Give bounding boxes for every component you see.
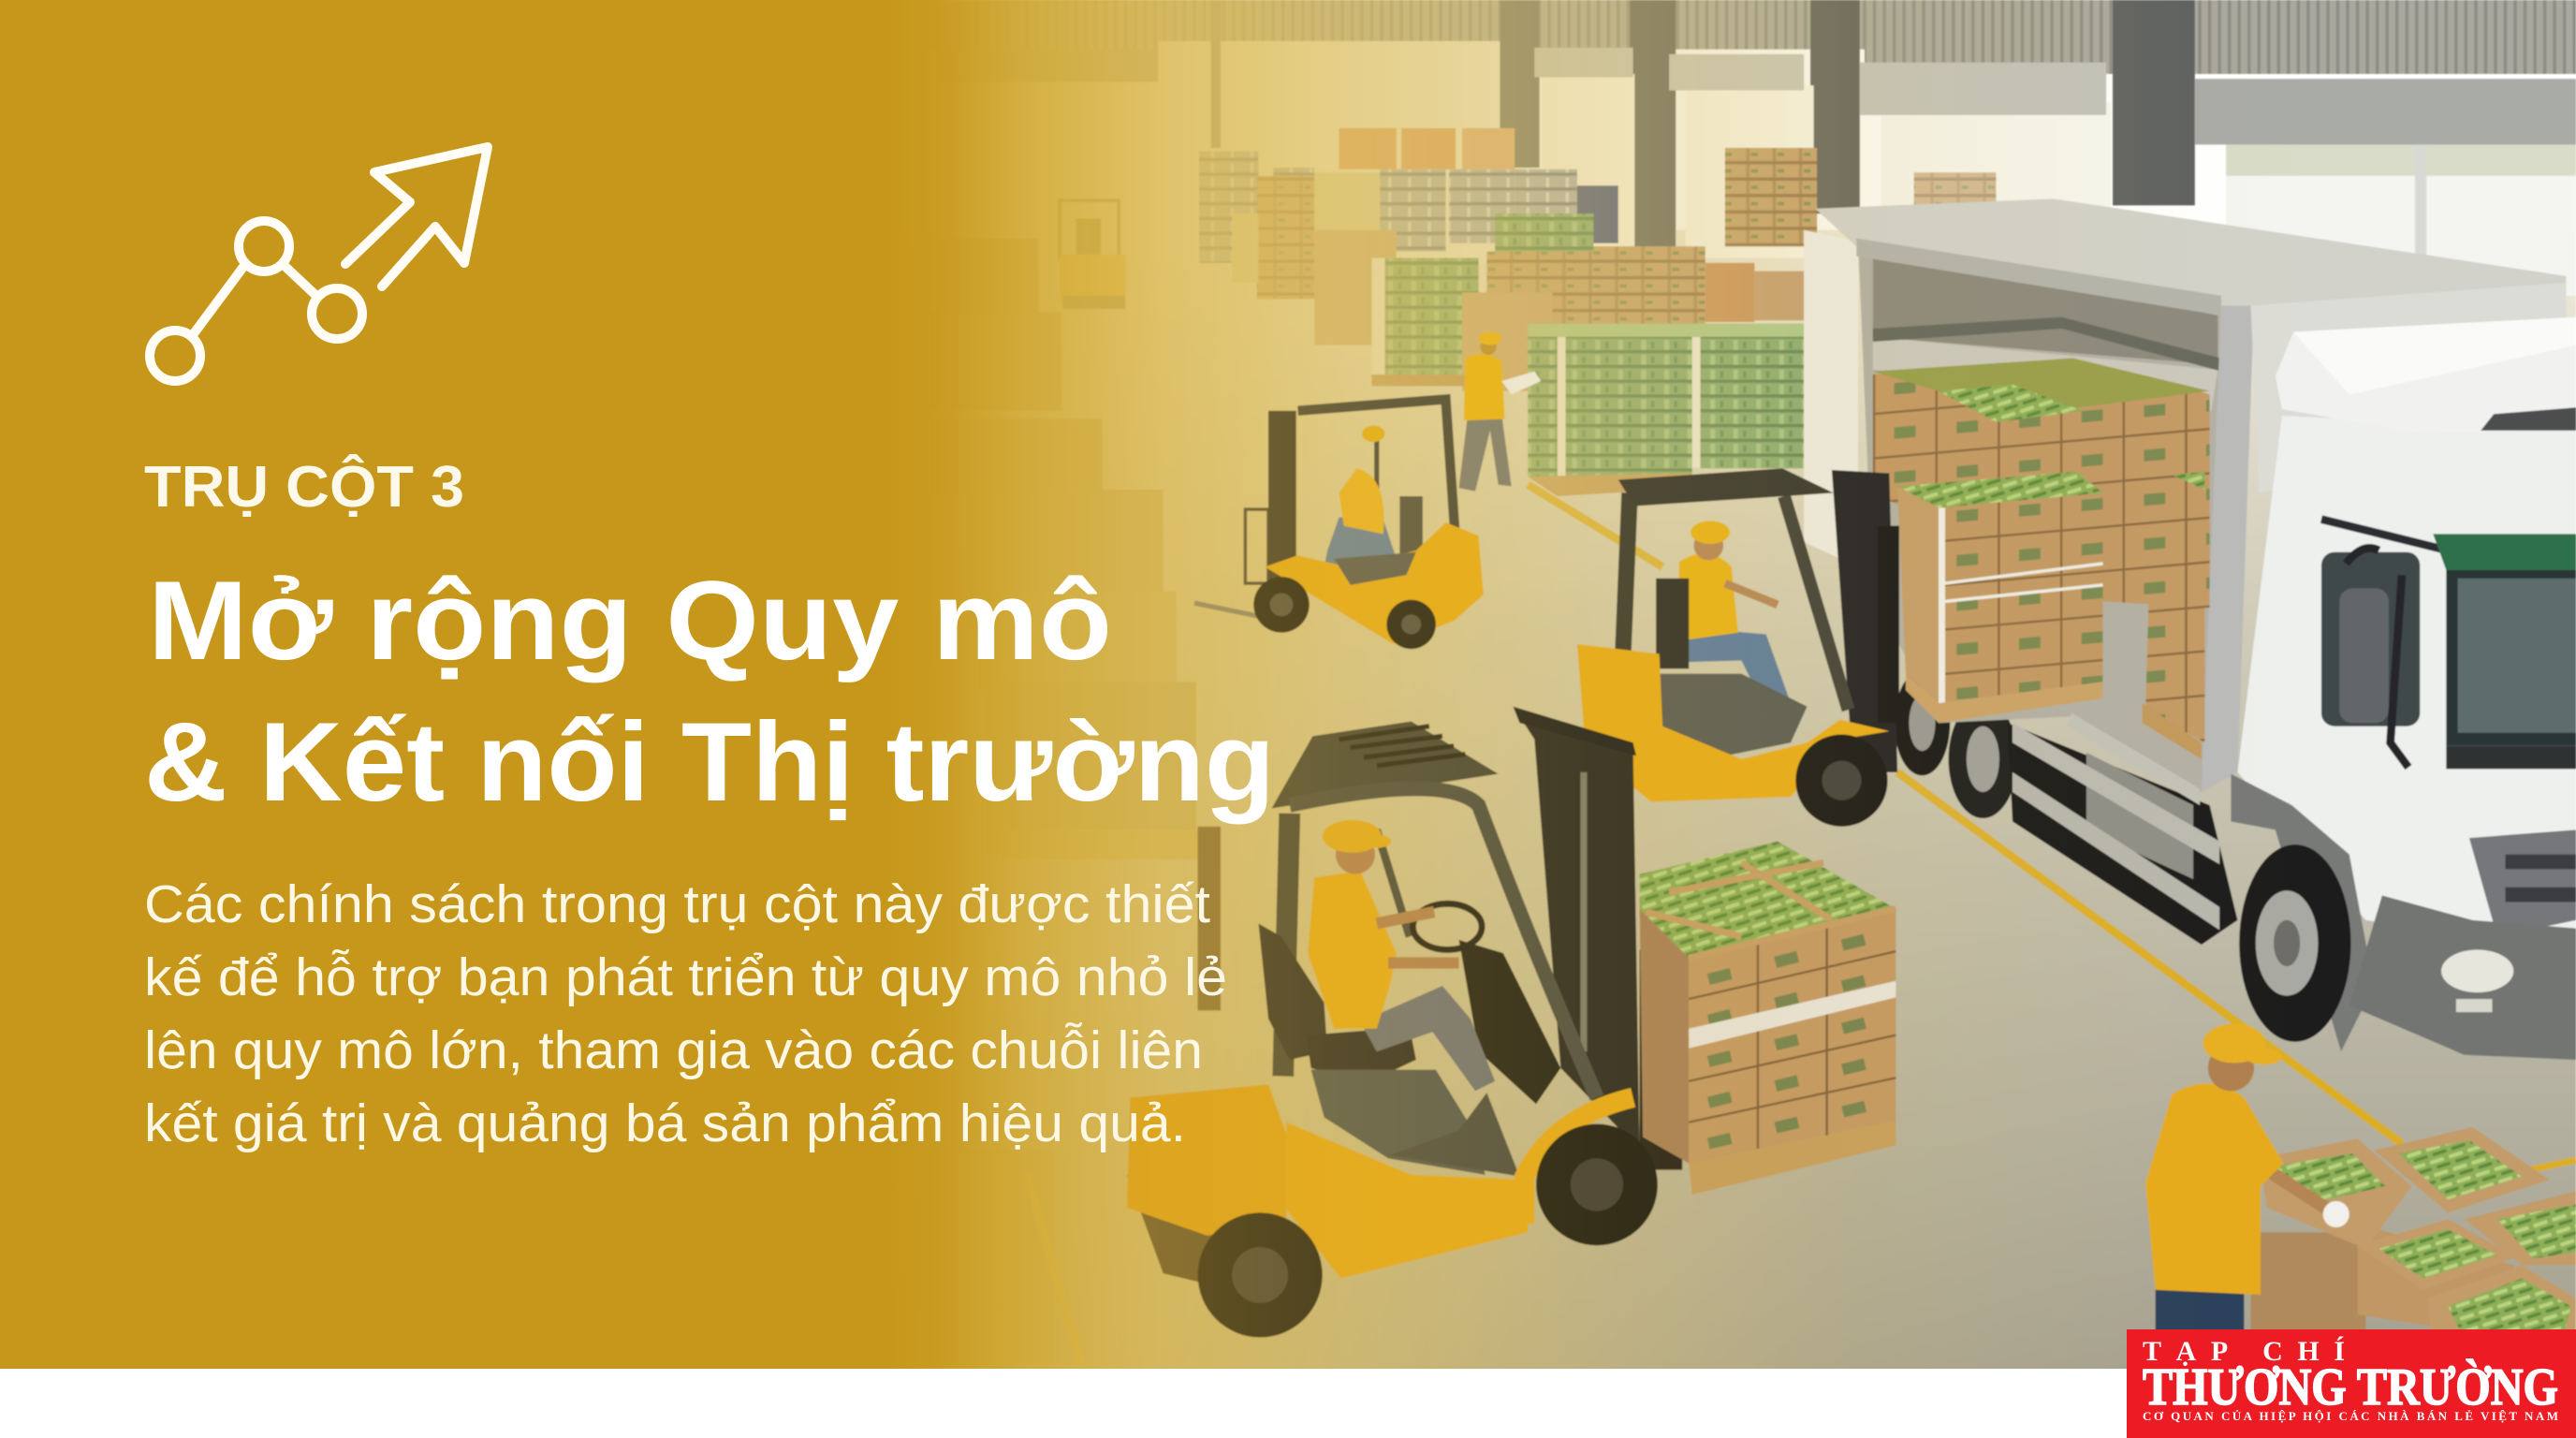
body paragraph: kế để hỗ trợ bạn phát triển từ quy mô nhỏ lẻ	[144, 947, 1227, 1007]
body paragraph: lên quy mô lớn, tham gia vào các chuỗi liên	[144, 1020, 1203, 1080]
far pallet stacks	[1199, 128, 1808, 391]
logo: Tạp chí Thương Trường: CƠ QUAN CỦA HIỆP HỘI CÁC NHÀ BÁN LẺ VIỆT NAM	[2143, 1409, 2558, 1423]
body paragraph: Các chính sách trong trụ cột này được thiết	[144, 874, 1210, 934]
main title	[144, 558, 1275, 825]
warehouse floor	[965, 229, 2576, 1369]
middle forklift	[1194, 399, 1484, 649]
right stack in truck	[2143, 472, 2204, 759]
front forklift seat	[1258, 923, 1416, 1084]
warehouse roof and back wall	[920, 0, 2576, 263]
main title: & Kết nối Thị trường	[144, 699, 1275, 825]
truck rear wheels	[1895, 680, 2012, 819]
pallet on centre forklift	[1897, 472, 2103, 723]
truck cab	[2231, 317, 2576, 1060]
body paragraph	[144, 874, 1227, 1153]
pale haze over the far warehouse	[919, 0, 1984, 1369]
centre forklift	[1577, 468, 1899, 827]
cucumber crates bottom right	[2250, 1127, 2576, 1339]
front forklift dashboard	[1459, 940, 1560, 1104]
logo: Tạp chí Thương Trường	[2127, 1329, 2576, 1438]
carton pallet on front forklift	[1640, 842, 1895, 1195]
truck front wheel	[2239, 844, 2351, 1042]
warehouse door openings	[1534, 48, 2576, 296]
background photo: warehouse scene	[916, 0, 2576, 1369]
main title: Mở rộng Quy mô	[148, 558, 1112, 683]
body paragraph: kết giá trị và quảng bá sản phẩm hiệu quả.	[144, 1093, 1186, 1153]
floor lane lines	[1027, 485, 2576, 1364]
icon: growth chart with arrow	[150, 147, 488, 381]
front forklift driver	[1308, 820, 1495, 1091]
logo: Tạp chí Thương Trường: TẠP CHÍ	[2143, 1336, 2345, 1367]
worker bottom right	[2145, 1023, 2349, 1347]
large green pallets	[1528, 324, 1804, 496]
truck chassis and side rails	[2008, 723, 2237, 945]
far forklift	[1060, 200, 1125, 309]
pillar label: TRỤ CỘT 3	[144, 455, 464, 520]
left pallet stacks under overlay	[1022, 240, 1198, 859]
front forklift	[1127, 707, 1682, 1338]
truck cargo box	[1804, 198, 2566, 805]
worker with clipboard	[1459, 332, 1541, 492]
white footer band	[0, 1369, 2127, 1438]
front forklift body	[1311, 1070, 1486, 1175]
cartons loaded in truck	[1873, 359, 2210, 608]
